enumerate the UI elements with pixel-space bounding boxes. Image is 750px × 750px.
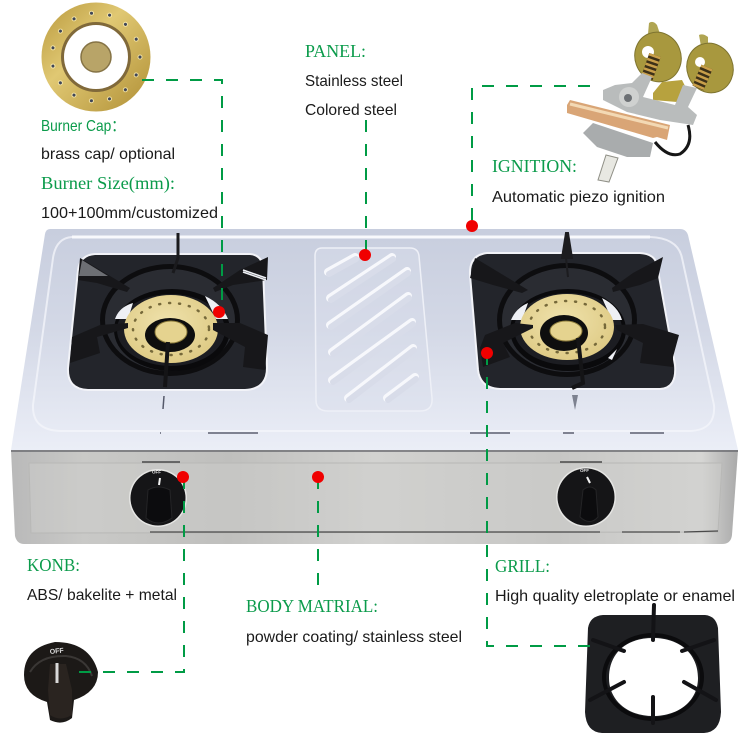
left burner plate — [68, 254, 267, 390]
front recessed frame — [29, 463, 722, 533]
text: burner cap — [41, 118, 218, 222]
center panel with slots — [315, 248, 432, 411]
text: burner cap: Burner Cap： — [41, 118, 125, 135]
text: grill — [495, 556, 735, 605]
leader: grill — [487, 353, 596, 646]
text: panel — [305, 41, 403, 119]
right hole crescents — [511, 298, 622, 360]
right brass burner — [520, 294, 614, 360]
burner valve discs — [628, 22, 740, 99]
leader: panel — [365, 120, 367, 255]
text: knob — [27, 555, 177, 604]
lower housing — [583, 123, 653, 157]
right knob — [556, 467, 616, 527]
grill frame — [585, 615, 721, 733]
left burner — [68, 233, 268, 409]
left knob — [129, 469, 187, 527]
leader: knob — [79, 477, 184, 672]
right burner — [470, 233, 679, 410]
left brass burner — [124, 295, 218, 363]
stem — [598, 155, 618, 182]
left grate arms — [70, 257, 268, 370]
icon: ignition assembly — [567, 22, 740, 182]
grill spokes — [590, 605, 716, 723]
text: burner cap: 100+100mm/customized — [41, 205, 218, 222]
text: grill: GRILL: — [495, 556, 550, 576]
leader: body — [317, 477, 319, 595]
icon: knob close-up — [24, 642, 98, 723]
text: ignition — [492, 156, 665, 206]
text: burner cap: Burner Size(mm): — [41, 173, 175, 194]
copper bar — [567, 100, 670, 140]
text: ignition: Automatic piezo ignition — [492, 189, 665, 206]
stove top panel — [11, 229, 738, 450]
leader: burner cap — [142, 80, 222, 312]
icon: brass burner cap — [42, 2, 150, 112]
text: ignition: IGNITION: — [492, 156, 577, 176]
right grate arms — [470, 257, 679, 367]
front body — [11, 450, 738, 544]
black wire — [655, 125, 690, 155]
left hole crescents — [115, 296, 228, 319]
icon: knob close-up: OFF — [49, 647, 65, 656]
text: grill: High quality eletroplate or enamel — [495, 588, 735, 605]
text: panel: Stainless steel — [305, 73, 403, 90]
icon: grill — [585, 605, 721, 733]
text: body material: powder coating/ stainless steel — [246, 629, 462, 646]
valve body — [603, 73, 697, 125]
red markers — [177, 220, 493, 483]
text: body material: BODY MATRIAL: — [246, 596, 378, 616]
pressed inset outline — [33, 237, 714, 431]
gold centre bracket — [653, 80, 688, 102]
leader: ignition — [472, 86, 590, 226]
right burner plate — [470, 253, 675, 389]
text: body material — [246, 596, 462, 646]
stove — [11, 229, 738, 544]
right knob: OFF — [580, 468, 589, 473]
text: burner cap: brass cap/ optional — [41, 146, 175, 163]
text: panel: PANEL: — [305, 41, 366, 61]
text: knob: KONB: — [27, 555, 80, 575]
left knob: OFF — [152, 470, 161, 474]
text: knob: ABS/ bakelite + metal — [27, 587, 177, 604]
text: panel: Colored steel — [305, 102, 397, 119]
